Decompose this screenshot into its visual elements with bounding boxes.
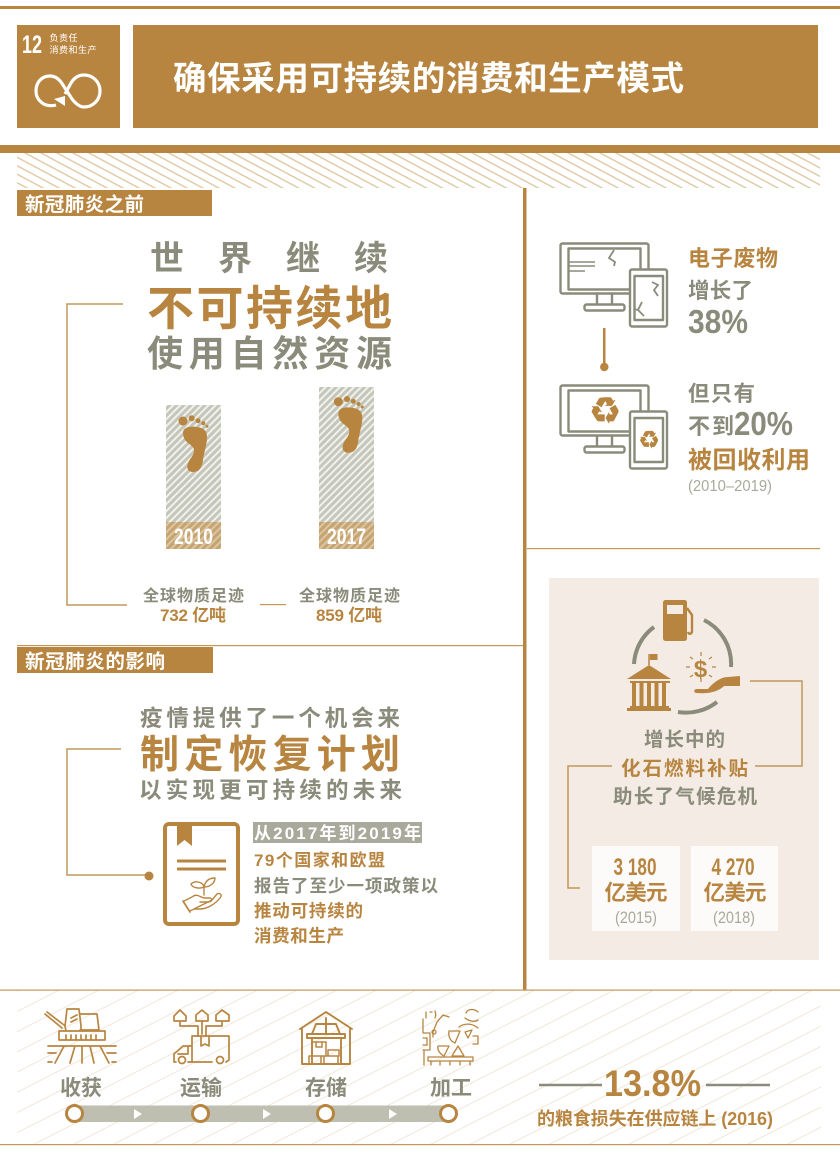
text: growing fossil fuel subsidies: 增长中的 — [644, 729, 725, 751]
text: growing fossil fuel subsidies: 助长了气候危机 — [613, 785, 757, 808]
caption: 2010 footprint value — [143, 586, 244, 625]
text: e-waste grew 38%: 38% — [688, 303, 748, 340]
icon: footprint 2010 — [178, 415, 208, 472]
text: e-waste grew 38%: 电子废物 — [688, 246, 778, 271]
panel: fossil fuel subsidies — [549, 578, 819, 960]
text: growing fossil fuel subsidies: 化石燃料补贴 — [621, 758, 748, 780]
section label: impact of COVID — [17, 647, 213, 673]
text: less than 20% recycled: 不到 — [688, 414, 734, 439]
heading: world continues unsustainable use — [147, 240, 392, 374]
labels: supply chain stages: 存储 — [305, 1077, 347, 1100]
heading: recovery plan: 以实现更可持续的未来 — [139, 777, 402, 803]
heading: world continues unsustainable use: 使用自然资源 — [147, 333, 392, 374]
text: growing fossil fuel subsidies — [613, 729, 757, 808]
heading: recovery plan — [139, 706, 402, 803]
stat: 13.8% food loss: 的粮食损失在供应链上 (2016) — [537, 1108, 773, 1129]
icon: SDG 12 badge: 负责任 — [50, 32, 78, 43]
icon: SDG 12 badge: 消费和生产 — [50, 44, 96, 55]
icon: recycled monitor and tablet: ♻ — [638, 426, 660, 454]
icon: policy book with plant — [165, 824, 238, 924]
title banner — [133, 25, 818, 128]
text: e-waste grew 38% — [688, 246, 778, 340]
bar: 2010 footprint — [166, 405, 221, 549]
icon: delivery truck — [174, 1010, 229, 1064]
icon: recycled monitor and tablet: ♻ — [589, 391, 621, 432]
bar: 2010 footprint: 2010 — [174, 524, 213, 549]
value card: 2015: 3 180 — [614, 854, 656, 881]
bar: 2017 footprint — [319, 387, 374, 549]
text: policy statistic: 从2017年到2019年 — [254, 823, 421, 843]
text: less than 20% recycled: 但只有 — [688, 382, 755, 406]
icon: subsidy cycle: $ — [694, 656, 708, 683]
text: policy statistic: 推动可持续的 — [254, 901, 363, 921]
value card: 2015 — [592, 846, 680, 931]
value card: 2015: (2015) — [615, 908, 657, 927]
caption: 2017 footprint value — [299, 586, 400, 625]
icon: recycled monitor and tablet — [560, 386, 667, 468]
value card: 2018: (2018) — [713, 908, 755, 927]
icon: subsidy cycle — [627, 600, 740, 713]
heading: world continues unsustainable use: 不可持续地 — [147, 282, 392, 335]
text: policy statistic: 消费和生产 — [254, 926, 344, 946]
icon: SDG 12 badge: 12 — [22, 31, 42, 59]
heading: world continues unsustainable use: 世界继续 — [150, 240, 388, 278]
text: policy statistic — [253, 822, 438, 946]
text: policy statistic: 报告了至少一项政策以 — [254, 876, 438, 896]
section label: before COVID — [17, 190, 212, 216]
text: policy statistic: 79个国家和欧盟 — [254, 850, 385, 870]
icon: warehouse — [300, 1012, 352, 1064]
text: e-waste grew 38%: 增长了 — [688, 279, 753, 303]
stat: 13.8% food loss — [537, 1063, 773, 1129]
value card: 2018 — [691, 846, 778, 931]
bar: 2017 footprint: 2017 — [327, 524, 366, 549]
text: less than 20% recycled — [688, 382, 810, 495]
value card: 2018: 亿美元 — [704, 881, 766, 905]
icon: broken monitor and tablet — [560, 244, 667, 326]
text: less than 20% recycled: 被回收利用 — [688, 447, 810, 474]
icon: food processing — [423, 1010, 478, 1065]
caption: 2017 footprint value: 859 亿吨 — [316, 606, 382, 625]
connector: monitor to monitor — [600, 328, 608, 371]
value card: 2018: 4 270 — [712, 854, 754, 881]
icon: harvester — [45, 1009, 116, 1063]
section label: before COVID: 新冠肺炎之前 — [25, 193, 144, 216]
caption: 2010 footprint value: 732 亿吨 — [160, 606, 226, 625]
heading: recovery plan: 疫情提供了一个机会来 — [140, 706, 400, 731]
stat: 13.8% food loss: 13.8% — [604, 1063, 701, 1104]
icon: footprint 2017 — [334, 396, 364, 453]
title banner: 确保采用可持续的消费和生产模式 — [173, 61, 684, 98]
heading: recovery plan: 制定恢复计划 — [140, 734, 400, 777]
panel: food loss supply chain — [0, 990, 840, 1145]
icon: SDG 12 badge — [17, 25, 120, 128]
text: less than 20% recycled: (2010–2019) — [688, 478, 772, 495]
labels: supply chain stages: 加工 — [430, 1077, 472, 1100]
text: less than 20% recycled: 20% — [734, 405, 793, 442]
timeline: supply chain steps — [66, 1106, 456, 1122]
value card: 2015: 亿美元 — [604, 881, 668, 905]
labels: supply chain stages — [60, 1077, 472, 1100]
section label: impact of COVID: 新冠肺炎的影响 — [25, 651, 165, 673]
labels: supply chain stages: 运输 — [180, 1077, 222, 1100]
labels: supply chain stages: 收获 — [60, 1077, 102, 1100]
caption: 2010 footprint value: 全球物质足迹 — [143, 586, 244, 605]
caption: 2017 footprint value: 全球物质足迹 — [299, 586, 400, 605]
